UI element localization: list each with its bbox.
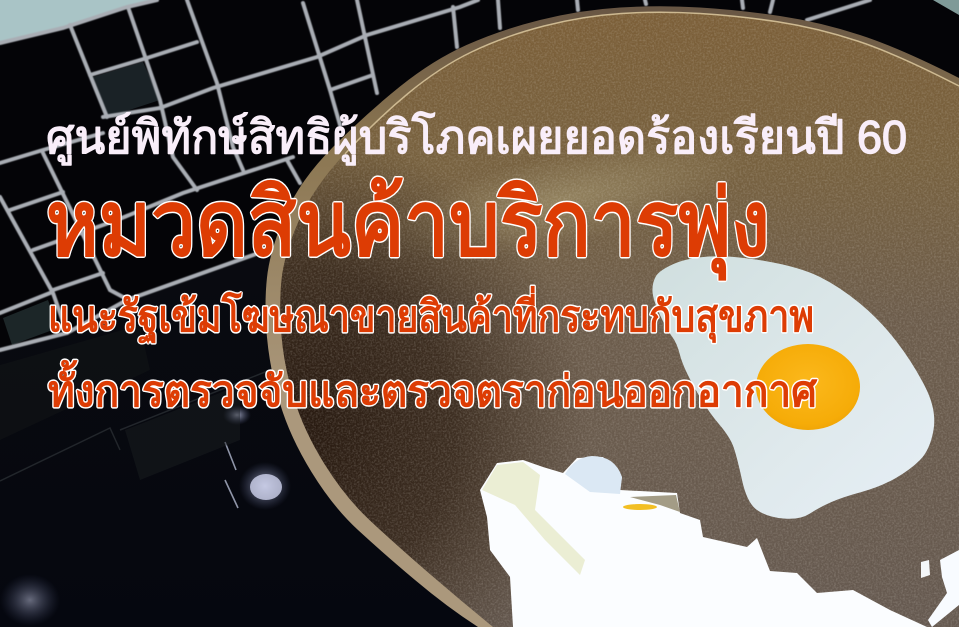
- headline line 3: แนะรัฐเข้มโฆษณาขายสินค้าที่กระทบกับสุขภาพ: [48, 286, 814, 344]
- counter reflections: [0, 325, 291, 626]
- fried egg: [652, 256, 934, 519]
- broken egg white: [480, 456, 959, 627]
- yolk: [756, 344, 860, 430]
- headline line 2: หมวดสินค้าบริการพุ่ง: [46, 173, 770, 281]
- headline line 1: ศูนย์พิทักษ์สิทธิผู้บริโภคเผยยอดร้องเรียนปี 60: [46, 111, 907, 165]
- headline line 4: ทั้งการตรวจจับและตรวจตราก่อนออกอากาศ: [48, 359, 818, 416]
- frying pan: [266, 5, 959, 627]
- tiled wall: [0, 0, 959, 350]
- light wall corner: [0, 0, 157, 43]
- headline block: [46, 111, 907, 416]
